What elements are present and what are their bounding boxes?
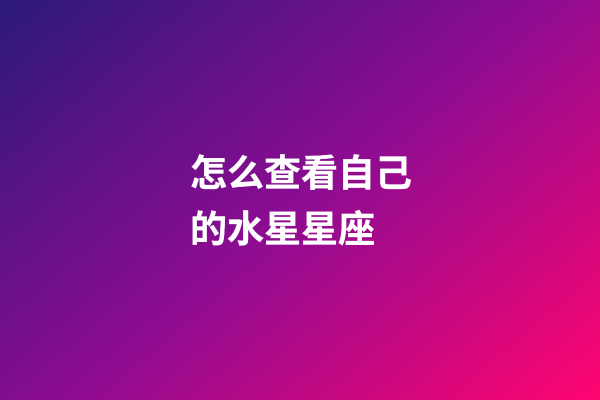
title [190,153,412,250]
title: 的水星星座 [190,209,375,250]
title: 怎么查看自己 [190,153,412,194]
